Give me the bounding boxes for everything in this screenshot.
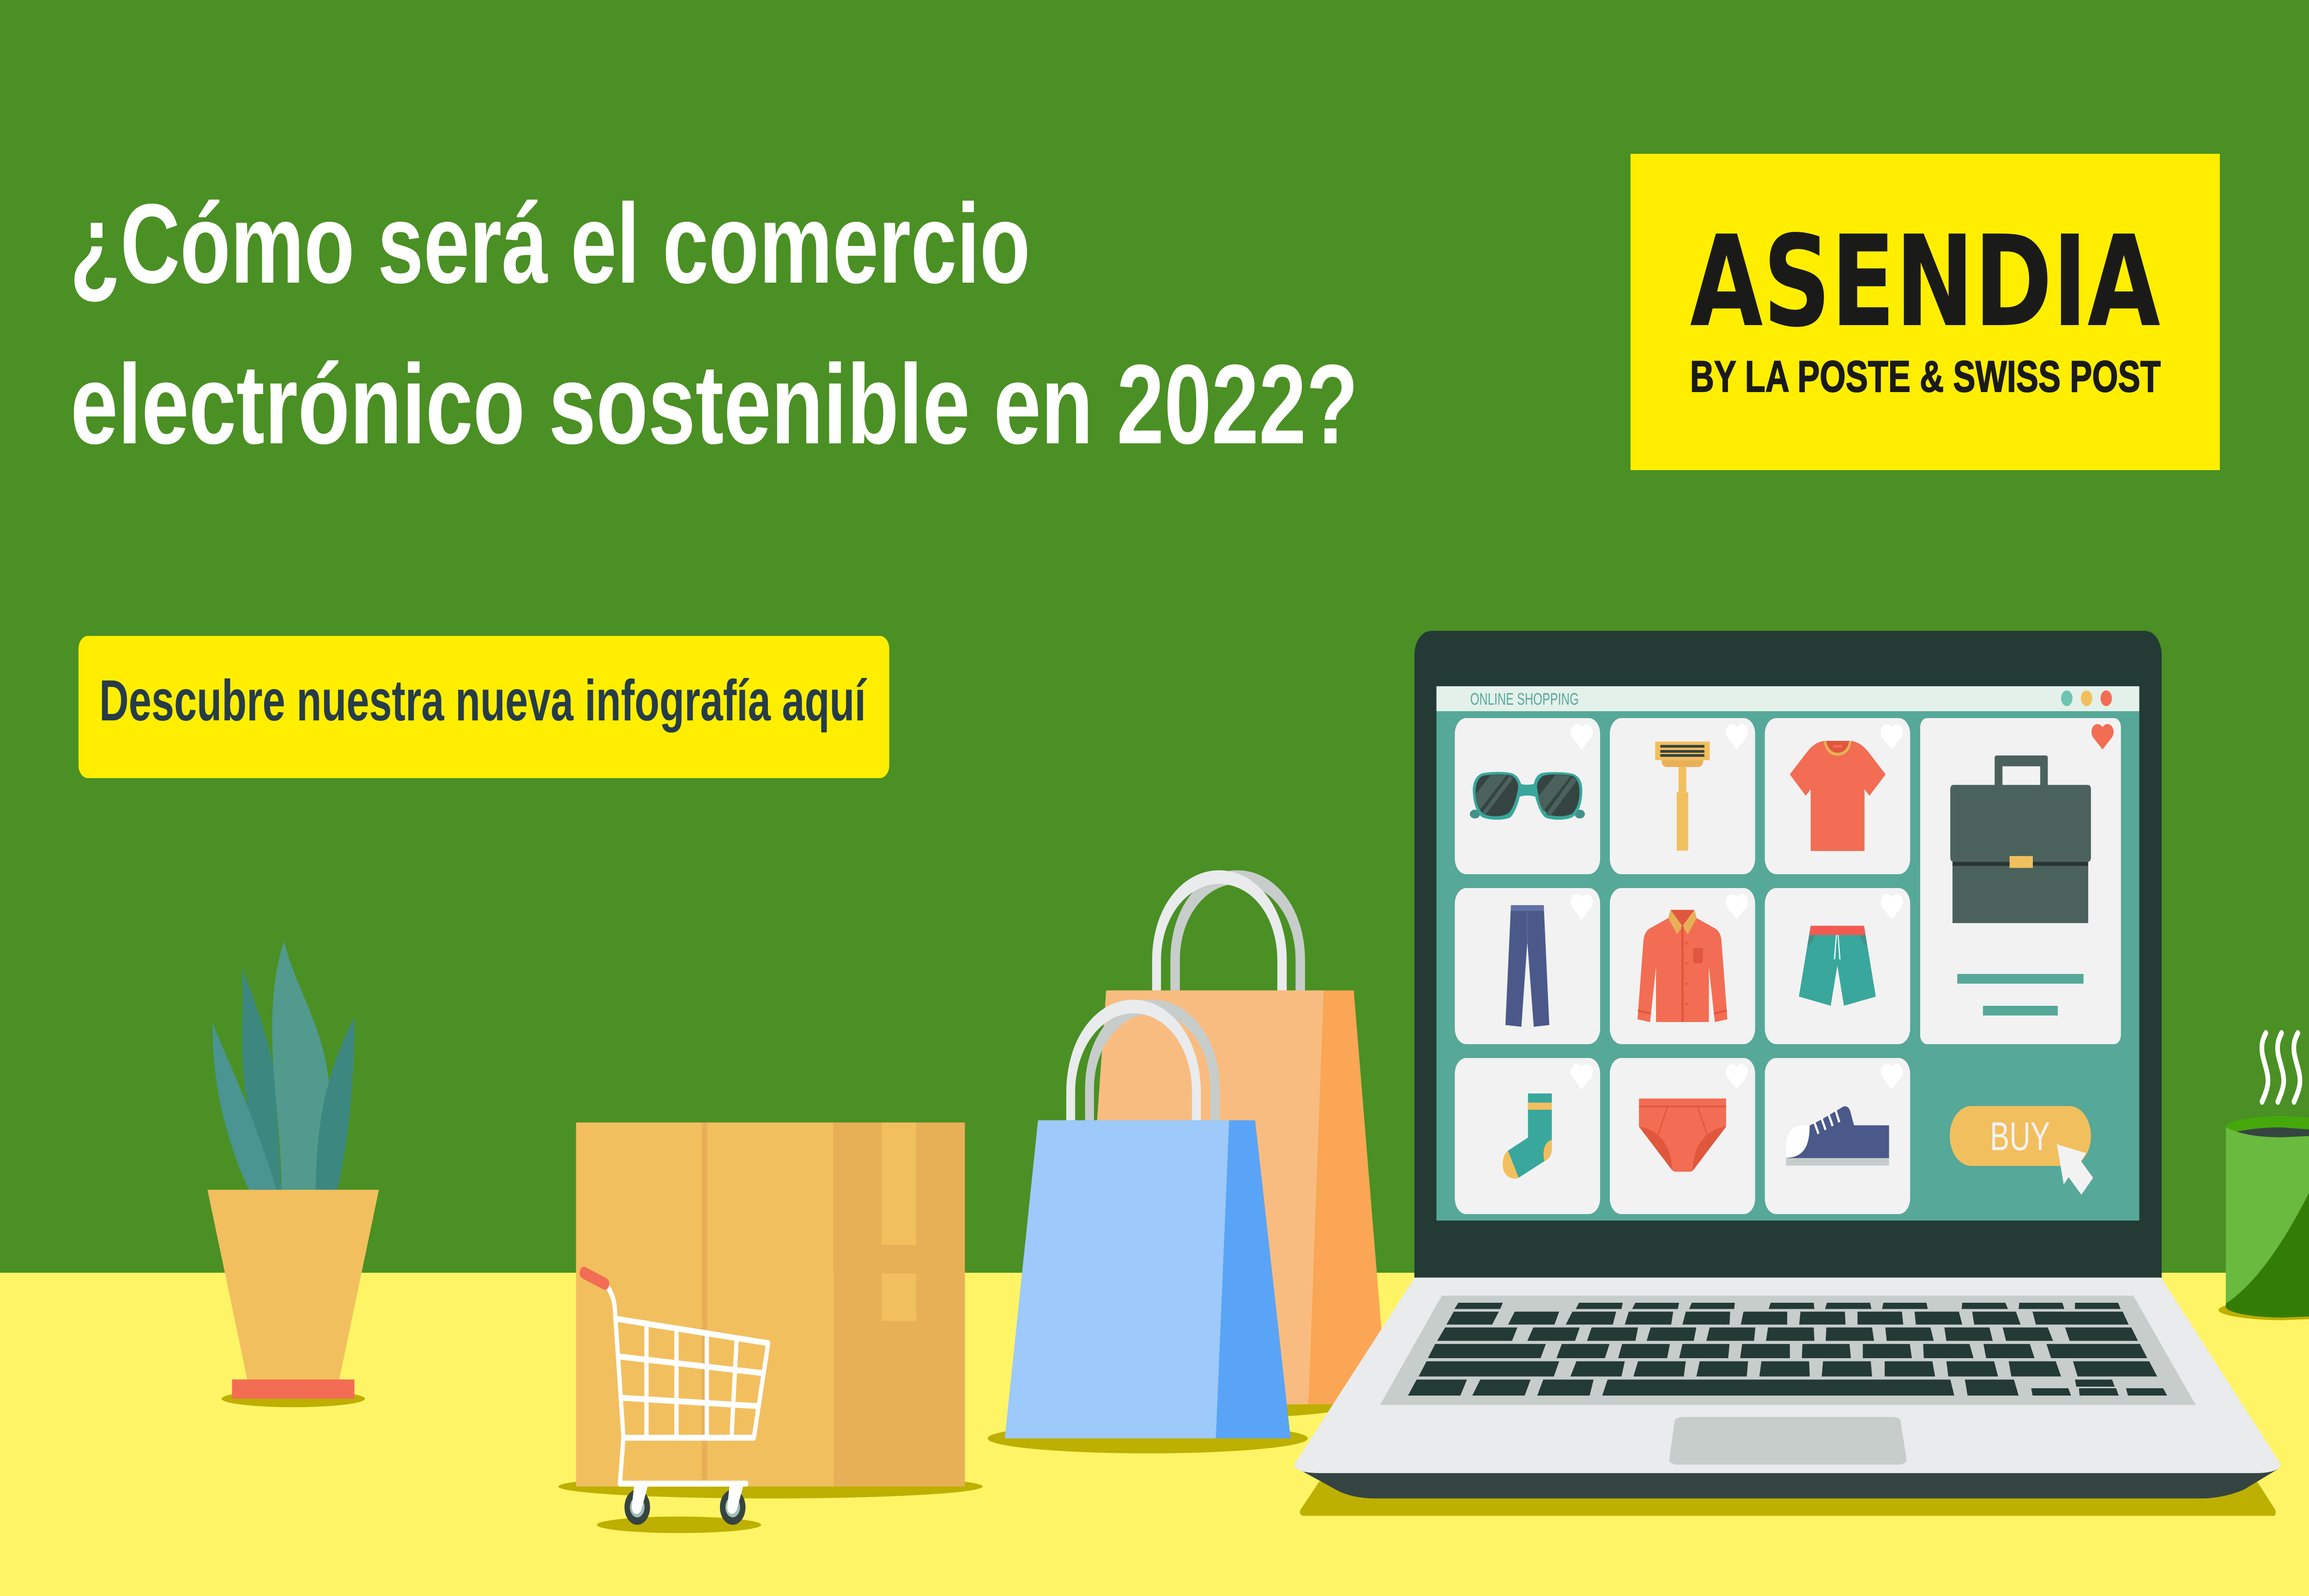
keyboard keys xyxy=(1408,1303,2167,1396)
laptop lid xyxy=(1414,631,2162,1278)
icon: green coffee cup xyxy=(2218,1034,2309,1320)
icon: shopping cart xyxy=(584,1273,768,1533)
Asendia logo: ASENDIA xyxy=(1690,209,2160,355)
icon: potted plant xyxy=(207,941,379,1407)
Asendia logo: BY LA POSTE & SWISS POST xyxy=(1690,351,2161,401)
Asendia logo xyxy=(1631,154,2220,470)
icon: cardboard box xyxy=(558,1123,983,1499)
title: electrónico sostenible en 2022? xyxy=(71,341,1358,468)
icon: shirt xyxy=(1638,910,1728,1022)
laptop screen xyxy=(1437,686,2140,1221)
icon: underwear xyxy=(1639,1099,1726,1172)
icon: t-shirt xyxy=(1790,741,1886,851)
browser window dots xyxy=(2061,690,2112,706)
laptop base xyxy=(1294,1278,2281,1516)
icon: sock xyxy=(1503,1094,1552,1179)
icon: sneaker xyxy=(1786,1106,1889,1166)
icon: briefcase xyxy=(1950,756,2091,923)
icon: jeans xyxy=(1505,905,1549,1027)
icon: blue shopping bag xyxy=(988,1000,1308,1453)
call to action button xyxy=(79,636,889,778)
steam xyxy=(2262,1034,2300,1101)
product cards xyxy=(1455,718,2121,1214)
buy button: BUY xyxy=(1990,1114,2050,1159)
icon: sunglasses xyxy=(1470,772,1585,820)
call to action button: Descubre nuestra nueva infografía aquí xyxy=(99,669,867,733)
icon: mouse cursor xyxy=(2057,1144,2093,1195)
icon: shorts xyxy=(1799,926,1876,1006)
title xyxy=(70,181,1358,468)
icon: razor xyxy=(1655,742,1710,851)
icon: orange shopping bag xyxy=(1033,870,1388,1419)
icons: favourite hearts xyxy=(1571,724,2114,1089)
browser title text: ONLINE SHOPPING xyxy=(1470,690,1579,708)
title: ¿Cómo será el comercio xyxy=(70,181,1030,307)
laptop xyxy=(1294,631,2281,1516)
product text placeholder lines xyxy=(1957,974,2084,1016)
buy button xyxy=(1950,1106,2091,1166)
